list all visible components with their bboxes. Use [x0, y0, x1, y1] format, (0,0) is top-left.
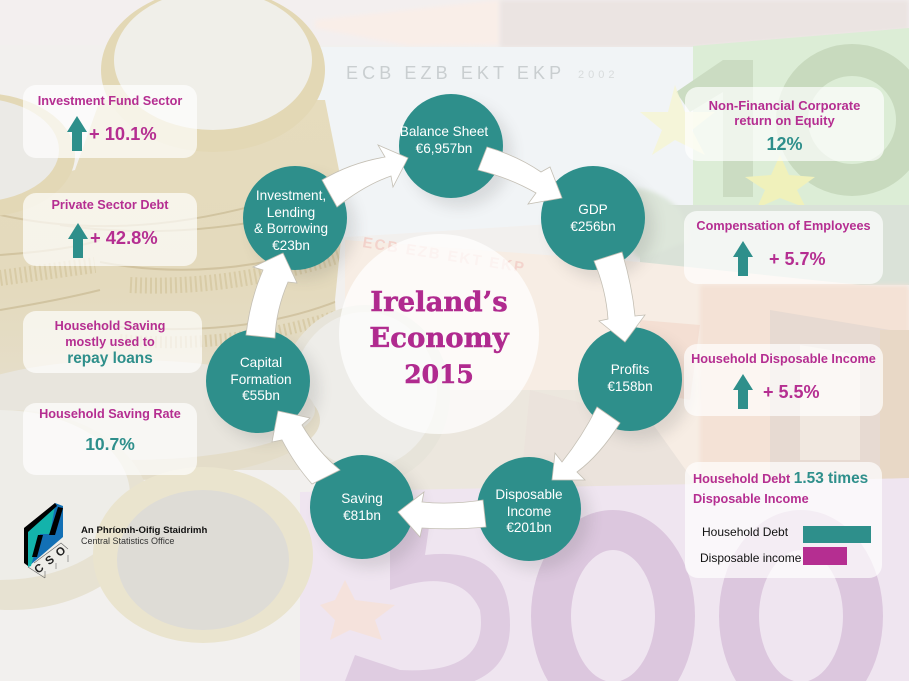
node: Investment, Lending & Borrowing: Lending — [267, 204, 315, 220]
label: Compensation of Employees — [696, 219, 871, 233]
background: euro coins and banknotes: ECB EZB EKT EKP — [361, 234, 527, 277]
node: Balance Sheet: €6,957bn — [416, 140, 472, 156]
logo text — [81, 525, 207, 546]
icon: CSO mark — [24, 503, 69, 578]
value: 10.7% — [85, 434, 135, 454]
node: Disposable Income: Disposable — [495, 487, 563, 502]
node: Profits: Profits — [611, 362, 649, 377]
icon: up arrow — [68, 223, 88, 258]
panel: Private Sector Debt — [23, 193, 197, 266]
title — [369, 286, 510, 389]
panel: Household Disposable Income — [684, 344, 883, 416]
icon: up arrow — [733, 241, 753, 276]
value: + 42.8% — [90, 227, 158, 248]
arrow: disposable income to saving — [398, 492, 486, 537]
heading — [693, 470, 868, 506]
background: euro coins and banknotes: 2002 — [578, 69, 618, 81]
node: Balance Sheet: Balance Sheet — [400, 124, 488, 139]
value: + 5.5% — [763, 382, 820, 402]
text: Household Saving — [55, 319, 165, 333]
node: Capital Formation — [206, 329, 310, 433]
node: Investment, Lending & Borrowing: & Borrowing — [254, 221, 328, 236]
node: Profits — [578, 327, 682, 431]
arrow: GDP to profits — [594, 252, 645, 342]
node: Disposable Income — [477, 457, 581, 561]
arrow: balance sheet to GDP — [478, 147, 562, 204]
label: Investment Fund Sector — [38, 94, 182, 108]
five hundred note — [300, 478, 909, 681]
logo: Central Statistics Office — [24, 503, 207, 578]
panel: Household Debt — [685, 462, 882, 578]
title: 2015 — [404, 360, 474, 389]
bottom left coins — [0, 410, 150, 610]
label: Private Sector Debt — [51, 198, 169, 212]
node: Investment, Lending & Borrowing: Investment, — [256, 188, 326, 203]
node: GDP — [541, 166, 645, 270]
top banknotes — [0, 0, 909, 45]
value: 12% — [766, 134, 803, 154]
title: Ireland’s — [370, 286, 508, 318]
node: Saving: €81bn — [343, 508, 381, 522]
grey coin under stack — [280, 305, 450, 485]
node: Balance Sheet — [399, 94, 503, 198]
heading: Disposable Income — [693, 492, 809, 506]
icon: up arrow — [67, 116, 87, 151]
value: + 5.7% — [769, 249, 826, 269]
node: Profits: €158bn — [607, 378, 653, 394]
node: GDP: €256bn — [570, 218, 616, 234]
arrow: capital formation to investment — [246, 253, 297, 338]
node: Investment, Lending & Borrowing — [243, 166, 347, 270]
arrow: saving to capital formation — [272, 411, 340, 484]
text — [55, 319, 165, 367]
panel: Investment Fund Sector — [23, 85, 197, 158]
bar label: household debt: Household Debt — [702, 525, 788, 539]
text: mostly used to — [65, 334, 155, 348]
node: Capital Formation: Capital — [240, 355, 282, 370]
node: Investment, Lending & Borrowing: €23bn — [272, 238, 310, 252]
label: Non-Financial Corporate — [709, 98, 860, 113]
text: repay loans — [67, 350, 153, 367]
node: Capital Formation: Formation — [230, 372, 292, 386]
ECB lettering: ECB EZB EKT EKP — [346, 63, 565, 83]
label: return on Equity — [734, 113, 835, 128]
bar: disposable income — [803, 547, 847, 565]
label: Household Saving Rate — [39, 407, 181, 421]
central circle: Ireland's Economy 2015 — [339, 234, 539, 434]
arrow: profits to disposable income — [552, 407, 620, 480]
green ten note — [300, 47, 693, 240]
node: Disposable Income: Income — [507, 504, 551, 518]
panel: Household Saving — [23, 311, 202, 373]
icon: CSO mark: C S O — [32, 544, 69, 576]
node: Saving — [310, 455, 414, 559]
panel: Non-Financial Corporate return on Equity — [685, 87, 884, 161]
title: Economy — [369, 322, 509, 354]
logo text: Central Statistics Office — [81, 536, 174, 546]
arrow: investment to balance sheet — [322, 145, 408, 207]
icon: up arrow — [733, 374, 753, 409]
node: Capital Formation: €55bn — [242, 388, 280, 403]
bar label: disposable income: Disposable income — [700, 551, 801, 565]
panel: Household Saving Rate — [23, 403, 197, 475]
node: GDP: GDP — [578, 202, 608, 217]
label — [709, 98, 860, 128]
node: Disposable Income: €201bn — [506, 520, 552, 535]
fifty note — [345, 240, 909, 490]
panel: Compensation of Employees — [684, 211, 883, 284]
value: + 10.1% — [89, 123, 157, 144]
logo text: An Phríomh-Oifig Staidrimh — [81, 525, 207, 536]
node: Saving: Saving — [341, 491, 383, 506]
heading: Household Debt 1.53 times — [693, 470, 868, 487]
label: Household Disposable Income — [691, 352, 876, 366]
coin stacks — [0, 60, 345, 470]
bar: household debt — [803, 526, 871, 543]
